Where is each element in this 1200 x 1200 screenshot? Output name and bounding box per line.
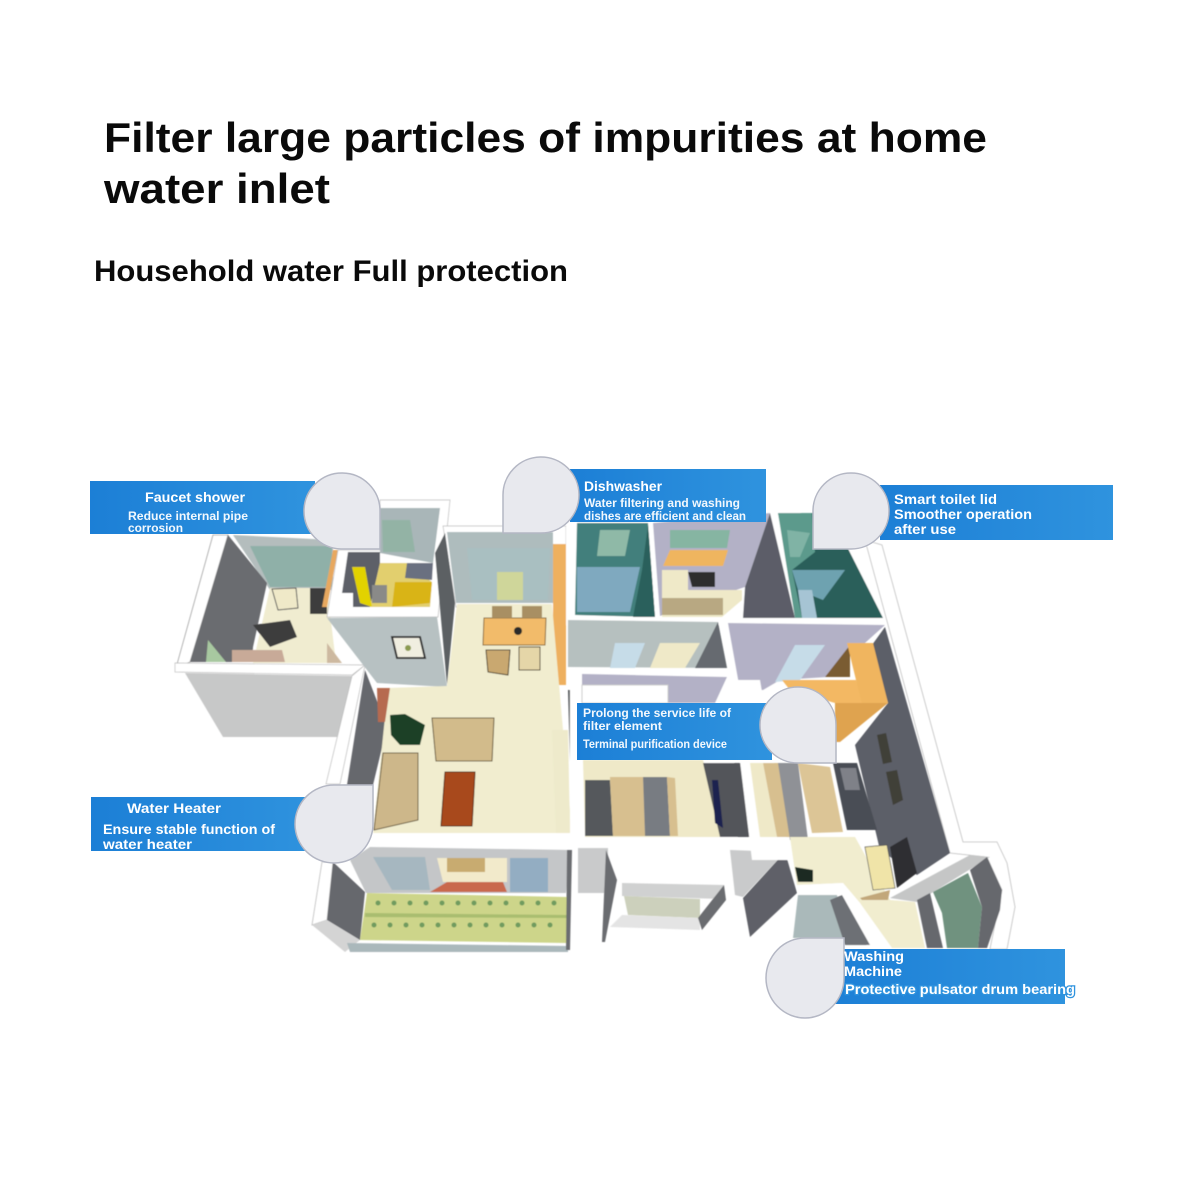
curved bay window [890, 855, 1002, 948]
callout: faucet shower: Faucet shower [145, 489, 246, 505]
callout: smart toilet lid: Smart toilet lid [894, 491, 997, 507]
callout: water heater: water heater [102, 836, 193, 852]
callout: faucet shower: corrosion [128, 521, 183, 535]
living room floor [373, 604, 577, 833]
callout: terminal purification device [577, 687, 836, 763]
top middle rooms [566, 505, 895, 625]
title: water inlet [103, 165, 330, 212]
callout: smart toilet lid [813, 473, 1113, 549]
callout: smart toilet lid: after use [894, 521, 956, 537]
callout: terminal purification device: filter element [583, 719, 662, 733]
title: Filter large particles of impurities at home [104, 114, 987, 161]
pin: water heater [295, 785, 373, 863]
callout: dishwasher: Water filtering and washing [584, 496, 740, 510]
callout: faucet shower [90, 473, 380, 549]
callout: smart toilet lid: Smoother operation [894, 506, 1032, 522]
callout: washing machine: Machine [844, 963, 902, 979]
front wall of study [175, 663, 387, 785]
callout: water heater: Ensure stable function of [103, 821, 275, 837]
callout: water heater [91, 785, 373, 863]
study room [176, 535, 338, 668]
callout: washing machine: Washing [844, 948, 904, 964]
entry hall [790, 837, 925, 948]
callout: water heater: Water Heater [127, 800, 222, 816]
callout: dishwasher: Dishwasher [584, 478, 663, 494]
kitchen [327, 500, 450, 687]
pin: washing machine [766, 938, 844, 1018]
balcony [312, 847, 572, 952]
callout: dishwasher [503, 457, 766, 533]
dining room [435, 526, 566, 685]
right bedroom [730, 680, 877, 860]
front middle walls [578, 848, 797, 942]
callout: terminal purification device: Prolong the service life of [583, 706, 732, 720]
title [103, 114, 987, 212]
floor plan [175, 500, 1015, 952]
lower bedroom [570, 674, 752, 848]
callout: dishwasher: dishes are efficient and clean [584, 509, 746, 523]
callout: terminal purification device: Terminal purification device [583, 737, 727, 751]
pin: faucet shower [304, 473, 380, 549]
callout: washing machine: Protective pulsator drum bearing [845, 981, 1075, 997]
outer right wall [865, 540, 1015, 949]
pin: dishwasher [503, 457, 579, 533]
callout: washing machine [766, 938, 1075, 1018]
middle wall with openings [568, 620, 727, 668]
subtitle: Household water Full protection [94, 255, 568, 288]
right hall [728, 623, 950, 875]
pin: terminal purification device [760, 687, 836, 763]
callout: faucet shower: Reduce internal pipe [128, 509, 248, 523]
pin: smart toilet lid [813, 473, 889, 549]
